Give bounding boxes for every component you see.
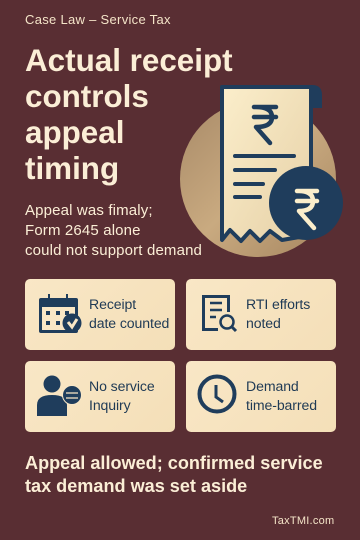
- conclusion: Appeal allowed; confirmed service: [25, 453, 323, 473]
- title: Actual receipt: [25, 43, 233, 78]
- icon: person with arrows badge: [37, 376, 81, 416]
- card: RTI efforts noted: [186, 279, 336, 350]
- label: time-barred: [246, 396, 317, 412]
- card: receipt date counted: [25, 279, 175, 350]
- title: [25, 43, 233, 186]
- receipt tab: [258, 85, 322, 108]
- receipt lines: [235, 156, 294, 197]
- eyebrow label: Case Law – Service Tax: [25, 12, 171, 27]
- card: demand time-barred: [186, 361, 336, 432]
- subtitle: [25, 202, 202, 259]
- title: timing: [25, 151, 119, 186]
- icon: calendar with badge: [39, 294, 82, 333]
- subtitle: Form 2645 alone: [25, 222, 141, 239]
- label: Inquiry: [89, 396, 131, 412]
- label: [246, 378, 317, 412]
- subtitle: Appeal was fimaly;: [25, 202, 153, 219]
- label: Demand: [246, 378, 299, 394]
- label: [89, 378, 155, 413]
- icon: document with magnifier: [202, 295, 237, 332]
- illustration: receipt with rupee coin: [180, 85, 343, 257]
- label: [89, 296, 169, 330]
- label: Receipt: [89, 296, 136, 312]
- rupee coin: [269, 166, 343, 240]
- conclusion: tax demand was set aside: [25, 476, 247, 496]
- title: appeal: [25, 115, 124, 150]
- icon: clock: [198, 374, 236, 414]
- backdrop circle: [180, 101, 336, 257]
- label: noted: [246, 314, 281, 330]
- coin rupee symbol: [297, 191, 317, 228]
- label: RTI efforts: [246, 296, 310, 312]
- label: No service: [89, 378, 155, 394]
- subtitle: could not support demand: [25, 242, 202, 259]
- footer brand: TaxTMI.com: [272, 515, 334, 527]
- label: date counted: [89, 314, 169, 330]
- receipt paper: [222, 87, 311, 241]
- label: [246, 296, 310, 330]
- conclusion: [25, 453, 323, 496]
- receipt rupee symbol: [254, 107, 276, 143]
- card: no service inquiry: [25, 361, 175, 432]
- title: controls: [25, 79, 149, 114]
